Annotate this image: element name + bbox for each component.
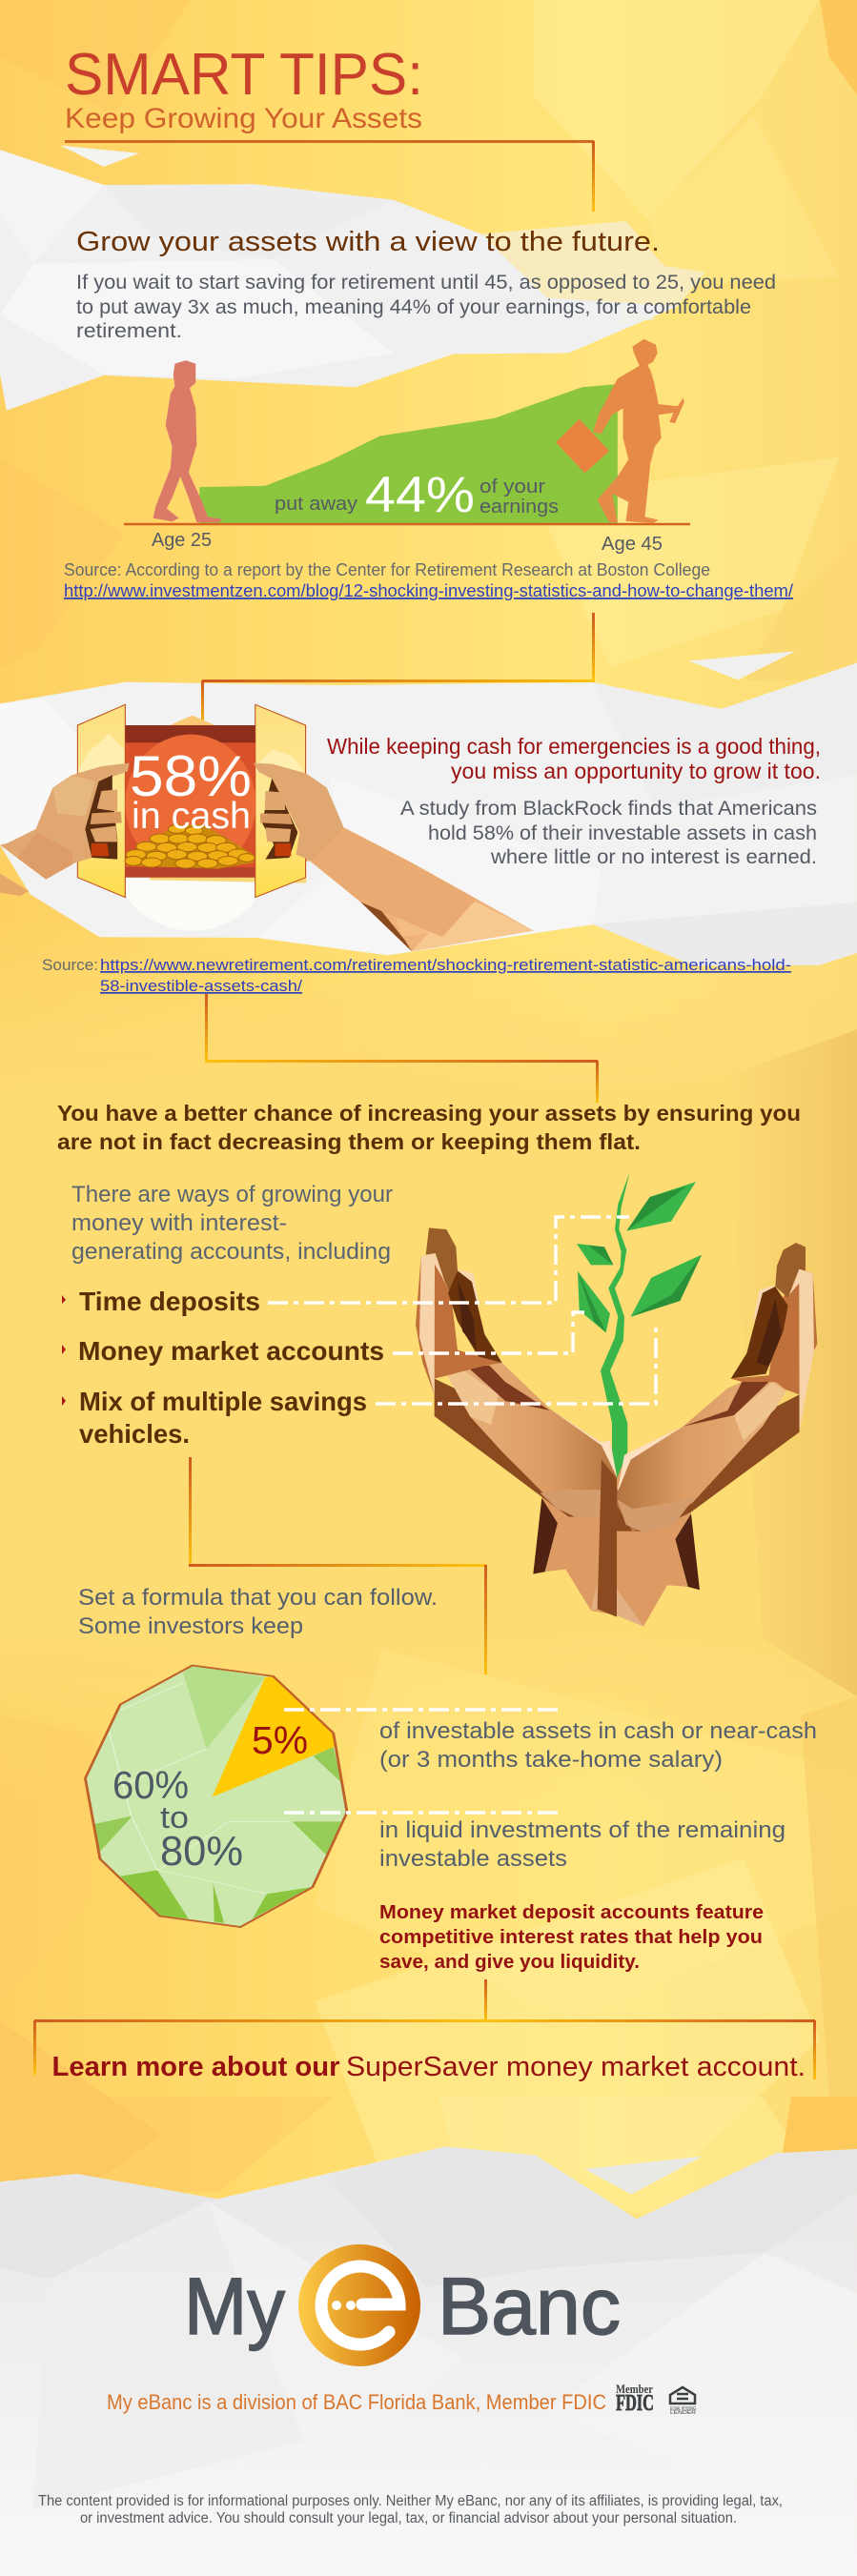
logo dots bbox=[332, 2301, 356, 2310]
source 1 bbox=[64, 560, 793, 600]
section 1 heading: Grow your assets with a view to the future. bbox=[76, 227, 660, 257]
section 3 intro: money with interest- bbox=[71, 1210, 287, 1236]
FDIC mark: FDIC bbox=[616, 2391, 654, 2416]
faceted pie chart bbox=[85, 1665, 347, 1927]
leaves bbox=[626, 1182, 696, 1231]
title bbox=[65, 42, 423, 134]
equal housing lender icon bbox=[670, 2387, 696, 2416]
logo e mark bbox=[321, 2266, 399, 2344]
money market note: Money market deposit accounts feature bbox=[379, 1902, 764, 1923]
connector line 2 bbox=[201, 613, 595, 731]
illustration: hands holding sprout bbox=[416, 1172, 817, 1627]
section 1 paragraph: If you wait to start saving for retirement until 45, as opposed to 25, you need bbox=[76, 272, 776, 294]
wrist bbox=[541, 1458, 691, 1627]
formula intro: Set a formula that you can follow. bbox=[78, 1585, 438, 1611]
icon: young person age 25 bbox=[153, 360, 222, 522]
5% slice bbox=[212, 1676, 335, 1797]
source 2: Source: bbox=[42, 956, 98, 974]
right fingers bbox=[731, 1269, 817, 1394]
source 2: 58-investible-assets-cash/ bbox=[100, 977, 302, 995]
formula intro: Some investors keep bbox=[78, 1613, 303, 1639]
left palm bbox=[447, 1363, 617, 1517]
book centre bbox=[125, 725, 255, 878]
section 2 red statement: you miss an opportunity to grow it too. bbox=[451, 759, 821, 783]
source 2 bbox=[42, 956, 791, 995]
pie description text: in liquid investments of the remaining bbox=[379, 1817, 786, 1843]
bullet list: account types: vehicles. bbox=[79, 1419, 190, 1449]
equal housing lender icon: EQUAL HOUSING bbox=[670, 2406, 696, 2412]
sprout stem bbox=[601, 1172, 630, 1479]
source 1: http://www.investmentzen.com/blog/12-shocking-investing-statistics-and-how-to-change-them/ bbox=[64, 581, 793, 600]
big figure: 58% bbox=[130, 744, 252, 808]
60% to 80% label: 60% bbox=[112, 1763, 189, 1807]
FDIC mark bbox=[616, 2382, 654, 2416]
book left panel bbox=[77, 704, 125, 898]
section 1 paragraph: retirement. bbox=[76, 320, 182, 342]
connector line 4 bbox=[189, 1457, 487, 1674]
disclaimer bbox=[38, 2493, 783, 2526]
age labels: Age 25 bbox=[152, 530, 212, 551]
logo disc bbox=[298, 2244, 420, 2366]
division statement: My eBanc is a division of BAC Florida Bank, Member FDIC bbox=[107, 2390, 606, 2414]
section 3 intro: There are ways of growing your bbox=[71, 1182, 393, 1207]
icon: older person age 45 with briefcase bbox=[556, 339, 684, 523]
white low-poly band, middle bbox=[0, 651, 857, 965]
panel backdrop point bbox=[169, 716, 216, 726]
section 2 red statement: While keeping cash for emergencies is a good thing, bbox=[327, 734, 821, 759]
bullet list: account types: Money market accounts bbox=[78, 1336, 384, 1366]
section 2 paragraph: hold 58% of their investable assets in cash bbox=[428, 822, 817, 844]
in cash label: in cash bbox=[132, 796, 251, 837]
illustration: 58% in cash bbox=[0, 704, 534, 951]
chart label: 44% of your earnings: of your bbox=[480, 477, 545, 497]
logo word Banc: Banc bbox=[438, 2262, 621, 2351]
ground line bbox=[124, 523, 690, 525]
coin pile bbox=[126, 824, 254, 869]
book right panel bbox=[255, 704, 306, 898]
FDIC mark: Member bbox=[616, 2382, 653, 2396]
call to action: SuperSaver money market account. bbox=[346, 2052, 806, 2082]
pie description text: investable assets bbox=[379, 1846, 567, 1872]
title: SMART TIPS: bbox=[65, 42, 423, 108]
source 1: Source: According to a report by the Center for Retirement Research at Boston College bbox=[64, 560, 710, 579]
source 2: https://www.newretirement.com/retirement/shocking-retirement-statistic-americans-hold- bbox=[100, 956, 791, 974]
section 3 heading bbox=[57, 1101, 801, 1154]
area chart: savings growth bbox=[199, 384, 618, 524]
connector line 3 bbox=[205, 994, 599, 1103]
section 3 intro bbox=[71, 1182, 393, 1265]
left hand bbox=[0, 763, 130, 880]
section 3 heading: You have a better chance of increasing your assets by ensuring you bbox=[57, 1101, 801, 1126]
age labels bbox=[152, 530, 663, 555]
white low-poly footer bbox=[0, 2146, 857, 2576]
bullet list: account types: Mix of multiple savings bbox=[79, 1387, 367, 1416]
subtitle: Keep Growing Your Assets bbox=[65, 103, 422, 134]
chart label: 44% of your earnings: earnings bbox=[480, 497, 559, 517]
formula intro bbox=[78, 1585, 438, 1639]
disclaimer: or investment advice. You should consult your legal, tax, or financial advisor about your personal situation. bbox=[80, 2510, 737, 2526]
money market note: save, and give you liquidity. bbox=[379, 1952, 640, 1973]
disclaimer: The content provided is for informational purposes only. Neither My eBanc, nor any of its affiliates, is providing legal, tax, bbox=[38, 2493, 783, 2509]
section 2 red statement bbox=[327, 734, 821, 783]
section 1 paragraph: to put away 3x as much, meaning 44% of your earnings, for a comfortable bbox=[76, 296, 751, 318]
arm right bbox=[254, 763, 534, 951]
chart label: 44% of your earnings: put away bbox=[275, 494, 357, 515]
left arm fragment bbox=[0, 874, 29, 896]
5% label: 5% bbox=[252, 1718, 308, 1762]
chart label: 44% of your earnings: 44% bbox=[365, 467, 475, 523]
section 3 intro: generating accounts, including bbox=[71, 1239, 391, 1265]
call to action: Learn more about our bbox=[51, 2052, 339, 2082]
logo bbox=[184, 2244, 621, 2366]
call-to-action frame bbox=[33, 1979, 816, 2079]
money market note: competitive interest rates that help you bbox=[379, 1927, 763, 1948]
logo word My: My bbox=[184, 2262, 285, 2351]
bullet list: account types: Time deposits bbox=[79, 1287, 260, 1316]
dashed pie callouts bbox=[284, 1710, 561, 1813]
section 2 paragraph: where little or no interest is earned. bbox=[490, 846, 817, 868]
chart label: 44% of your earnings bbox=[275, 467, 559, 523]
white low-poly band, top bbox=[0, 146, 705, 411]
right palm bbox=[617, 1382, 786, 1531]
centre column bbox=[598, 1460, 617, 1617]
right hand fingers bbox=[262, 777, 297, 860]
60% to 80% label: 80% bbox=[160, 1828, 243, 1875]
60% to 80% label: to bbox=[160, 1800, 189, 1835]
left fingers bbox=[416, 1256, 502, 1394]
60% to 80% label bbox=[112, 1763, 243, 1875]
hand backs bbox=[435, 1379, 602, 1517]
money market note bbox=[379, 1902, 764, 1973]
age labels: Age 45 bbox=[602, 534, 663, 555]
call to action bbox=[51, 2052, 806, 2082]
pie description text bbox=[379, 1718, 817, 1872]
section 1 paragraph bbox=[76, 272, 776, 342]
section 3 heading: are not in fact decreasing them or keeping them flat. bbox=[57, 1129, 641, 1154]
pie description text: (or 3 months take-home salary) bbox=[379, 1747, 723, 1773]
connector line 1 bbox=[65, 140, 595, 212]
egg backdrop bbox=[113, 779, 272, 931]
dashed connectors to hands bbox=[268, 1217, 656, 1404]
equal housing lender icon: LENDER bbox=[670, 2410, 696, 2416]
section 2 paragraph bbox=[400, 798, 817, 868]
bullet list: account types bbox=[62, 1287, 384, 1449]
pie description text: of investable assets in cash or near-cash bbox=[379, 1718, 817, 1744]
section 2 paragraph: A study from BlackRock finds that Americans bbox=[400, 798, 817, 820]
bullet markers bbox=[62, 1295, 66, 1406]
sleeves bbox=[533, 1498, 558, 1574]
